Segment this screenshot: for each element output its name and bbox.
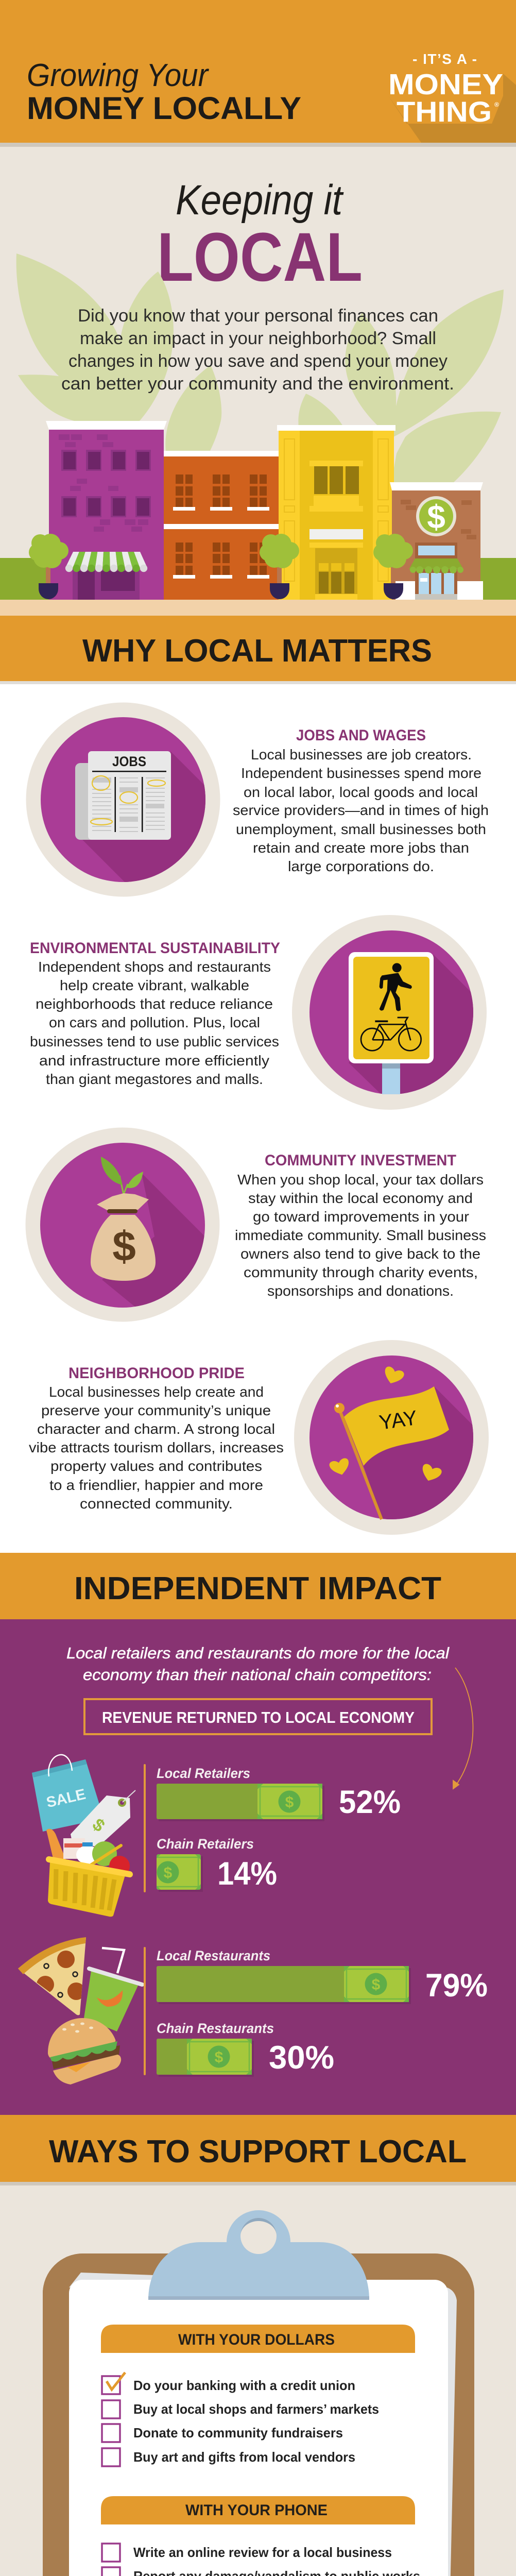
list: with your dollars: Do your banking with a credit union bbox=[133, 2378, 355, 2393]
text: neighborhood pride: character and charm. A strong local bbox=[37, 1421, 275, 1437]
icon: newspaper bbox=[75, 751, 171, 840]
arrow: to chart bbox=[453, 1668, 473, 1789]
panel: neighborhood pride icon bbox=[294, 1340, 489, 1535]
icon: dollar bill bbox=[344, 1966, 409, 2002]
hero title: Keeping it Local: LOCAL bbox=[157, 219, 363, 296]
intro paragraph: changes in how you save and spend your money bbox=[68, 351, 448, 371]
icon: shopping bag and basket: SALE bbox=[45, 1786, 88, 1811]
text: jobs and wages: unemployment, small businesses both bbox=[236, 821, 486, 837]
text: community investment: immediate community. Small business bbox=[235, 1227, 486, 1243]
icon: dollar bill: $ bbox=[164, 1865, 173, 1882]
header banner bbox=[0, 0, 516, 147]
potted tree 3 bbox=[373, 534, 413, 599]
text: environmental sustainability: and infrastructure more efficiently bbox=[39, 1053, 269, 1069]
chart row: local restaurants 79 percent bbox=[157, 1948, 488, 2004]
icon: yay flag with hearts bbox=[329, 1365, 449, 1519]
text: neighborhood pride: vibe attracts tourism dollars, increases bbox=[29, 1439, 284, 1455]
text: jobs and wages: retain and create more jobs than bbox=[253, 840, 469, 856]
text: community investment bbox=[235, 1152, 486, 1299]
chart row: local retailers 52 percent: Local Retailers bbox=[157, 1766, 250, 1781]
divider: retailers bbox=[144, 1764, 146, 1892]
icon: money bag with sprout: $ bbox=[112, 1223, 136, 1270]
chart row: local restaurants 79 percent: 79% bbox=[425, 1968, 488, 2004]
text: neighborhood pride: preserve your community’s unique bbox=[41, 1402, 271, 1418]
chart row: chain restaurants 30 percent bbox=[157, 2021, 334, 2077]
text: environmental sustainability: ENVIRONMENTAL SUSTAINABILITY bbox=[30, 940, 280, 957]
icon: pizza, drink and burger bbox=[18, 1937, 142, 2084]
hero title: Keeping it Local: Keeping it bbox=[176, 177, 344, 224]
text: neighborhood pride: NEIGHBORHOOD PRIDE bbox=[68, 1365, 245, 1382]
icon: dollar bill bbox=[152, 1854, 201, 1890]
list: with your phone: Write an online review for a local business bbox=[133, 2545, 392, 2560]
text: community investment: owners also tend to give back to the bbox=[240, 1246, 480, 1262]
chart row: local retailers 52 percent bbox=[157, 1766, 401, 1821]
text: jobs and wages: on local labor, local goods and local bbox=[244, 784, 478, 800]
panel: environmental sustainability icon bbox=[292, 915, 487, 1110]
intro paragraph bbox=[61, 306, 454, 394]
list: with your dollars: WITH YOUR DOLLARS bbox=[178, 2331, 335, 2348]
text: community investment: community through charity events, bbox=[244, 1264, 478, 1280]
chart row: chain restaurants 30 percent: Chain Restaurants bbox=[157, 2021, 274, 2036]
text: neighborhood pride: Local businesses help create and bbox=[49, 1384, 264, 1400]
icon: pedestrian and bicycle sign bbox=[349, 952, 434, 1094]
grass and sidewalk bbox=[0, 558, 516, 616]
logo: It's a Money Thing: ® bbox=[494, 101, 499, 108]
text: environmental sustainability: on cars and pollution. Plus, local bbox=[49, 1014, 260, 1030]
text: environmental sustainability: businesses tend to use public services bbox=[30, 1033, 279, 1049]
chart row: chain retailers 14 percent: Chain Retailers bbox=[157, 1836, 254, 1852]
list: with your dollars bbox=[101, 2325, 415, 2466]
list: with your phone bbox=[101, 2496, 423, 2576]
heading band: why local matters bbox=[0, 616, 516, 684]
icon: newspaper: JOBS bbox=[112, 754, 146, 769]
icon: money bag with sprout bbox=[91, 1157, 156, 1281]
bank dollar sign bbox=[416, 496, 456, 536]
chart row: chain restaurants 30 percent: 30% bbox=[269, 2040, 334, 2076]
divider: restaurants bbox=[144, 1947, 146, 2075]
list: with your phone: WITH YOUR PHONE bbox=[185, 2502, 328, 2519]
chart row: chain retailers 14 percent: 14% bbox=[217, 1856, 277, 1892]
text: jobs and wages: Independent businesses spend more bbox=[241, 765, 481, 781]
text: neighborhood pride: to a friendlier, happier and more bbox=[49, 1477, 263, 1493]
list: with your dollars: Buy art and gifts from local vendors bbox=[133, 2449, 355, 2465]
panel: clipboard checklist bbox=[43, 2210, 474, 2576]
yellow building bbox=[277, 425, 395, 600]
chart title: revenue returned: REVENUE RETURNED TO LOCAL ECONOMY bbox=[102, 1708, 415, 1726]
logo: It's a Money Thing bbox=[388, 51, 516, 143]
icon: dollar bill: $ bbox=[372, 1976, 381, 1993]
hero title: Keeping it Local bbox=[157, 177, 363, 296]
bank dollar sign: $ bbox=[427, 498, 445, 535]
text: neighborhood pride: property values and contributes bbox=[50, 1458, 262, 1474]
heading band: ways to support local: WAYS TO SUPPORT LOCAL bbox=[49, 2134, 467, 2170]
panel: community investment icon bbox=[26, 1127, 219, 1322]
heading band: ways to support local bbox=[0, 2115, 516, 2185]
heading band: independent impact bbox=[0, 1553, 516, 1619]
text: jobs and wages: large corporations do. bbox=[288, 858, 434, 874]
logo: It's a Money Thing: MONEY bbox=[388, 68, 503, 101]
potted tree 1 bbox=[29, 534, 68, 599]
chart row: local restaurants 79 percent: Local Restaurants bbox=[157, 1948, 270, 1963]
icon: shopping bag and basket bbox=[32, 1755, 135, 1917]
intro paragraph: can better your community and the environment. bbox=[61, 374, 454, 394]
text: community investment: COMMUNITY INVESTMENT bbox=[265, 1152, 456, 1169]
logo: It's a Money Thing: - IT’S A - bbox=[412, 51, 477, 67]
text: community investment: stay within the local economy and bbox=[248, 1190, 473, 1206]
illustration: main street bbox=[0, 421, 516, 616]
text: jobs and wages bbox=[233, 727, 489, 874]
text: environmental sustainability: than giant megastores and malls. bbox=[46, 1071, 263, 1087]
list: with your dollars: Donate to community fundraisers bbox=[133, 2425, 343, 2441]
logo: It's a Money Thing: THING bbox=[397, 95, 492, 128]
striped awning bbox=[65, 552, 147, 572]
brown bank building bbox=[390, 482, 483, 600]
purple building bbox=[46, 421, 167, 600]
heading band: why local matters: WHY LOCAL MATTERS bbox=[82, 633, 432, 669]
text: jobs and wages: JOBS AND WAGES bbox=[296, 727, 426, 744]
intro paragraph: make an impact in your neighborhood? Small bbox=[80, 329, 436, 348]
clipboard board bbox=[43, 2253, 474, 2576]
chart row: chain retailers 14 percent bbox=[152, 1836, 277, 1892]
text: environmental sustainability: Independent shops and restaurants bbox=[38, 959, 271, 975]
intro paragraph: Did you know that your personal finances can bbox=[78, 306, 438, 326]
chart title: revenue returned bbox=[84, 1699, 432, 1734]
icon: shopping bag and basket: $ bbox=[89, 1815, 109, 1836]
header title bbox=[27, 58, 301, 126]
icon: dollar bill bbox=[257, 1784, 322, 1819]
text: jobs and wages: service providers—and in times of high bbox=[233, 802, 489, 818]
orange building bbox=[164, 451, 282, 600]
text: environmental sustainability: neighborhoods that reduce reliance bbox=[36, 996, 273, 1012]
text: neighborhood pride bbox=[29, 1365, 284, 1512]
icon: dollar bill bbox=[187, 2039, 252, 2075]
text: environmental sustainability bbox=[30, 940, 280, 1087]
potted tree 2 bbox=[260, 534, 299, 599]
intro text: independent impact bbox=[66, 1644, 450, 1684]
icon: dollar bill: $ bbox=[285, 1794, 294, 1811]
header title: Growing Your bbox=[27, 58, 209, 93]
background leaves bbox=[16, 253, 504, 483]
intro text: independent impact: economy than their national chain competitors: bbox=[83, 1666, 432, 1684]
icon: yay flag with hearts: YAY bbox=[377, 1406, 419, 1434]
text: community investment: sponsorships and donations. bbox=[267, 1283, 454, 1299]
text: community investment: go toward improvements in your bbox=[253, 1209, 469, 1225]
icon: dollar bill: $ bbox=[215, 2049, 223, 2066]
panel: jobs and wages icon bbox=[26, 703, 220, 896]
under sheet bbox=[55, 2273, 457, 2576]
text: community investment: When you shop local, your tax dollars bbox=[237, 1172, 484, 1188]
list: with your dollars: Buy at local shops and farmers’ markets bbox=[133, 2401, 379, 2417]
paper sheet bbox=[69, 2280, 448, 2576]
text: environmental sustainability: help create vibrant, walkable bbox=[60, 977, 249, 993]
text: neighborhood pride: connected community. bbox=[80, 1496, 233, 1512]
icon: check mark bbox=[107, 2372, 125, 2389]
intro text: independent impact: Local retailers and restaurants do more for the local bbox=[66, 1644, 450, 1662]
header title: MONEY LOCALLY bbox=[27, 91, 301, 126]
chart row: local retailers 52 percent: 52% bbox=[339, 1784, 401, 1820]
clipboard clip bbox=[148, 2210, 369, 2300]
text: jobs and wages: Local businesses are job creators. bbox=[251, 747, 472, 762]
heading band: independent impact: INDEPENDENT IMPACT bbox=[74, 1571, 441, 1606]
